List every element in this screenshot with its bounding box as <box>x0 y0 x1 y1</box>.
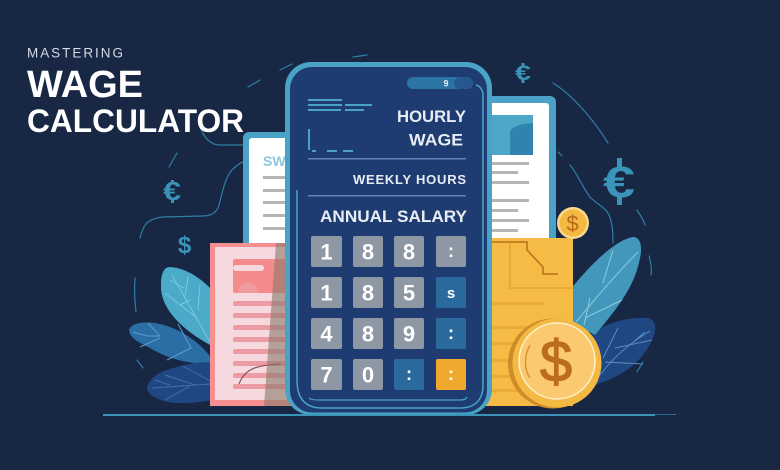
leaf: light teal right <box>570 237 641 335</box>
leaves right <box>570 237 655 388</box>
keypad: 1 <box>320 240 333 264</box>
status pill <box>407 77 473 89</box>
document: back left <box>243 132 303 247</box>
title block <box>27 46 244 139</box>
label: hourly wage: WAGE <box>409 132 463 150</box>
document: pink <box>210 243 295 406</box>
doc image block <box>485 115 533 155</box>
icon: small coin: $ <box>566 211 579 236</box>
document: yellow <box>485 238 573 406</box>
icon: floating currency symbol left upper: € <box>163 176 181 206</box>
icon: large currency symbol right: € <box>603 158 635 207</box>
heading: calculator: CALCULATOR <box>27 103 244 139</box>
document: back right <box>480 96 556 246</box>
icon: floating dollar left: $ <box>178 232 192 259</box>
doc label: SW <box>263 153 286 169</box>
leaf: dark blue <box>147 362 214 403</box>
keypad: : <box>448 323 454 343</box>
icon: floating currency symbol top right: € <box>515 62 531 85</box>
label: weekly hours: WEEKLY HOURS <box>353 172 466 187</box>
leaf: light teal <box>161 267 214 347</box>
icon: small coin <box>557 207 589 239</box>
keypad: : <box>448 241 454 261</box>
label: hourly wage: HOURLY <box>397 108 466 126</box>
keypad: 5 <box>403 280 415 306</box>
keypad: 8 <box>362 280 374 306</box>
keypad: s <box>447 285 455 302</box>
icon: large coin <box>508 318 602 408</box>
keypad: 8 <box>362 322 374 346</box>
mini chart <box>308 99 372 152</box>
keypad <box>311 236 466 390</box>
leaf: mid blue <box>129 323 214 363</box>
keypad: 4 <box>320 322 333 346</box>
icon: large coin: $ <box>540 329 572 394</box>
keypad: 9 <box>403 322 415 346</box>
pink doc image block <box>233 259 295 293</box>
keypad: 0 <box>362 362 374 388</box>
leaves left <box>129 267 214 403</box>
leaf: dark blue right <box>590 318 655 388</box>
keypad: : <box>406 364 412 384</box>
keypad: : <box>448 364 454 384</box>
phone <box>285 62 492 415</box>
label: annual salary: ANNUAL SALARY <box>320 208 467 226</box>
status pill: 9 <box>443 78 449 88</box>
label: hourly wage <box>397 108 466 150</box>
keypad: 8 <box>362 240 374 264</box>
overline: mastering: MASTERING <box>27 46 123 60</box>
keypad: 8 <box>403 240 415 264</box>
keypad: 7 <box>320 362 333 388</box>
baseline <box>103 414 676 416</box>
keypad: 1 <box>320 280 333 306</box>
heading: wage: WAGE <box>27 64 143 106</box>
